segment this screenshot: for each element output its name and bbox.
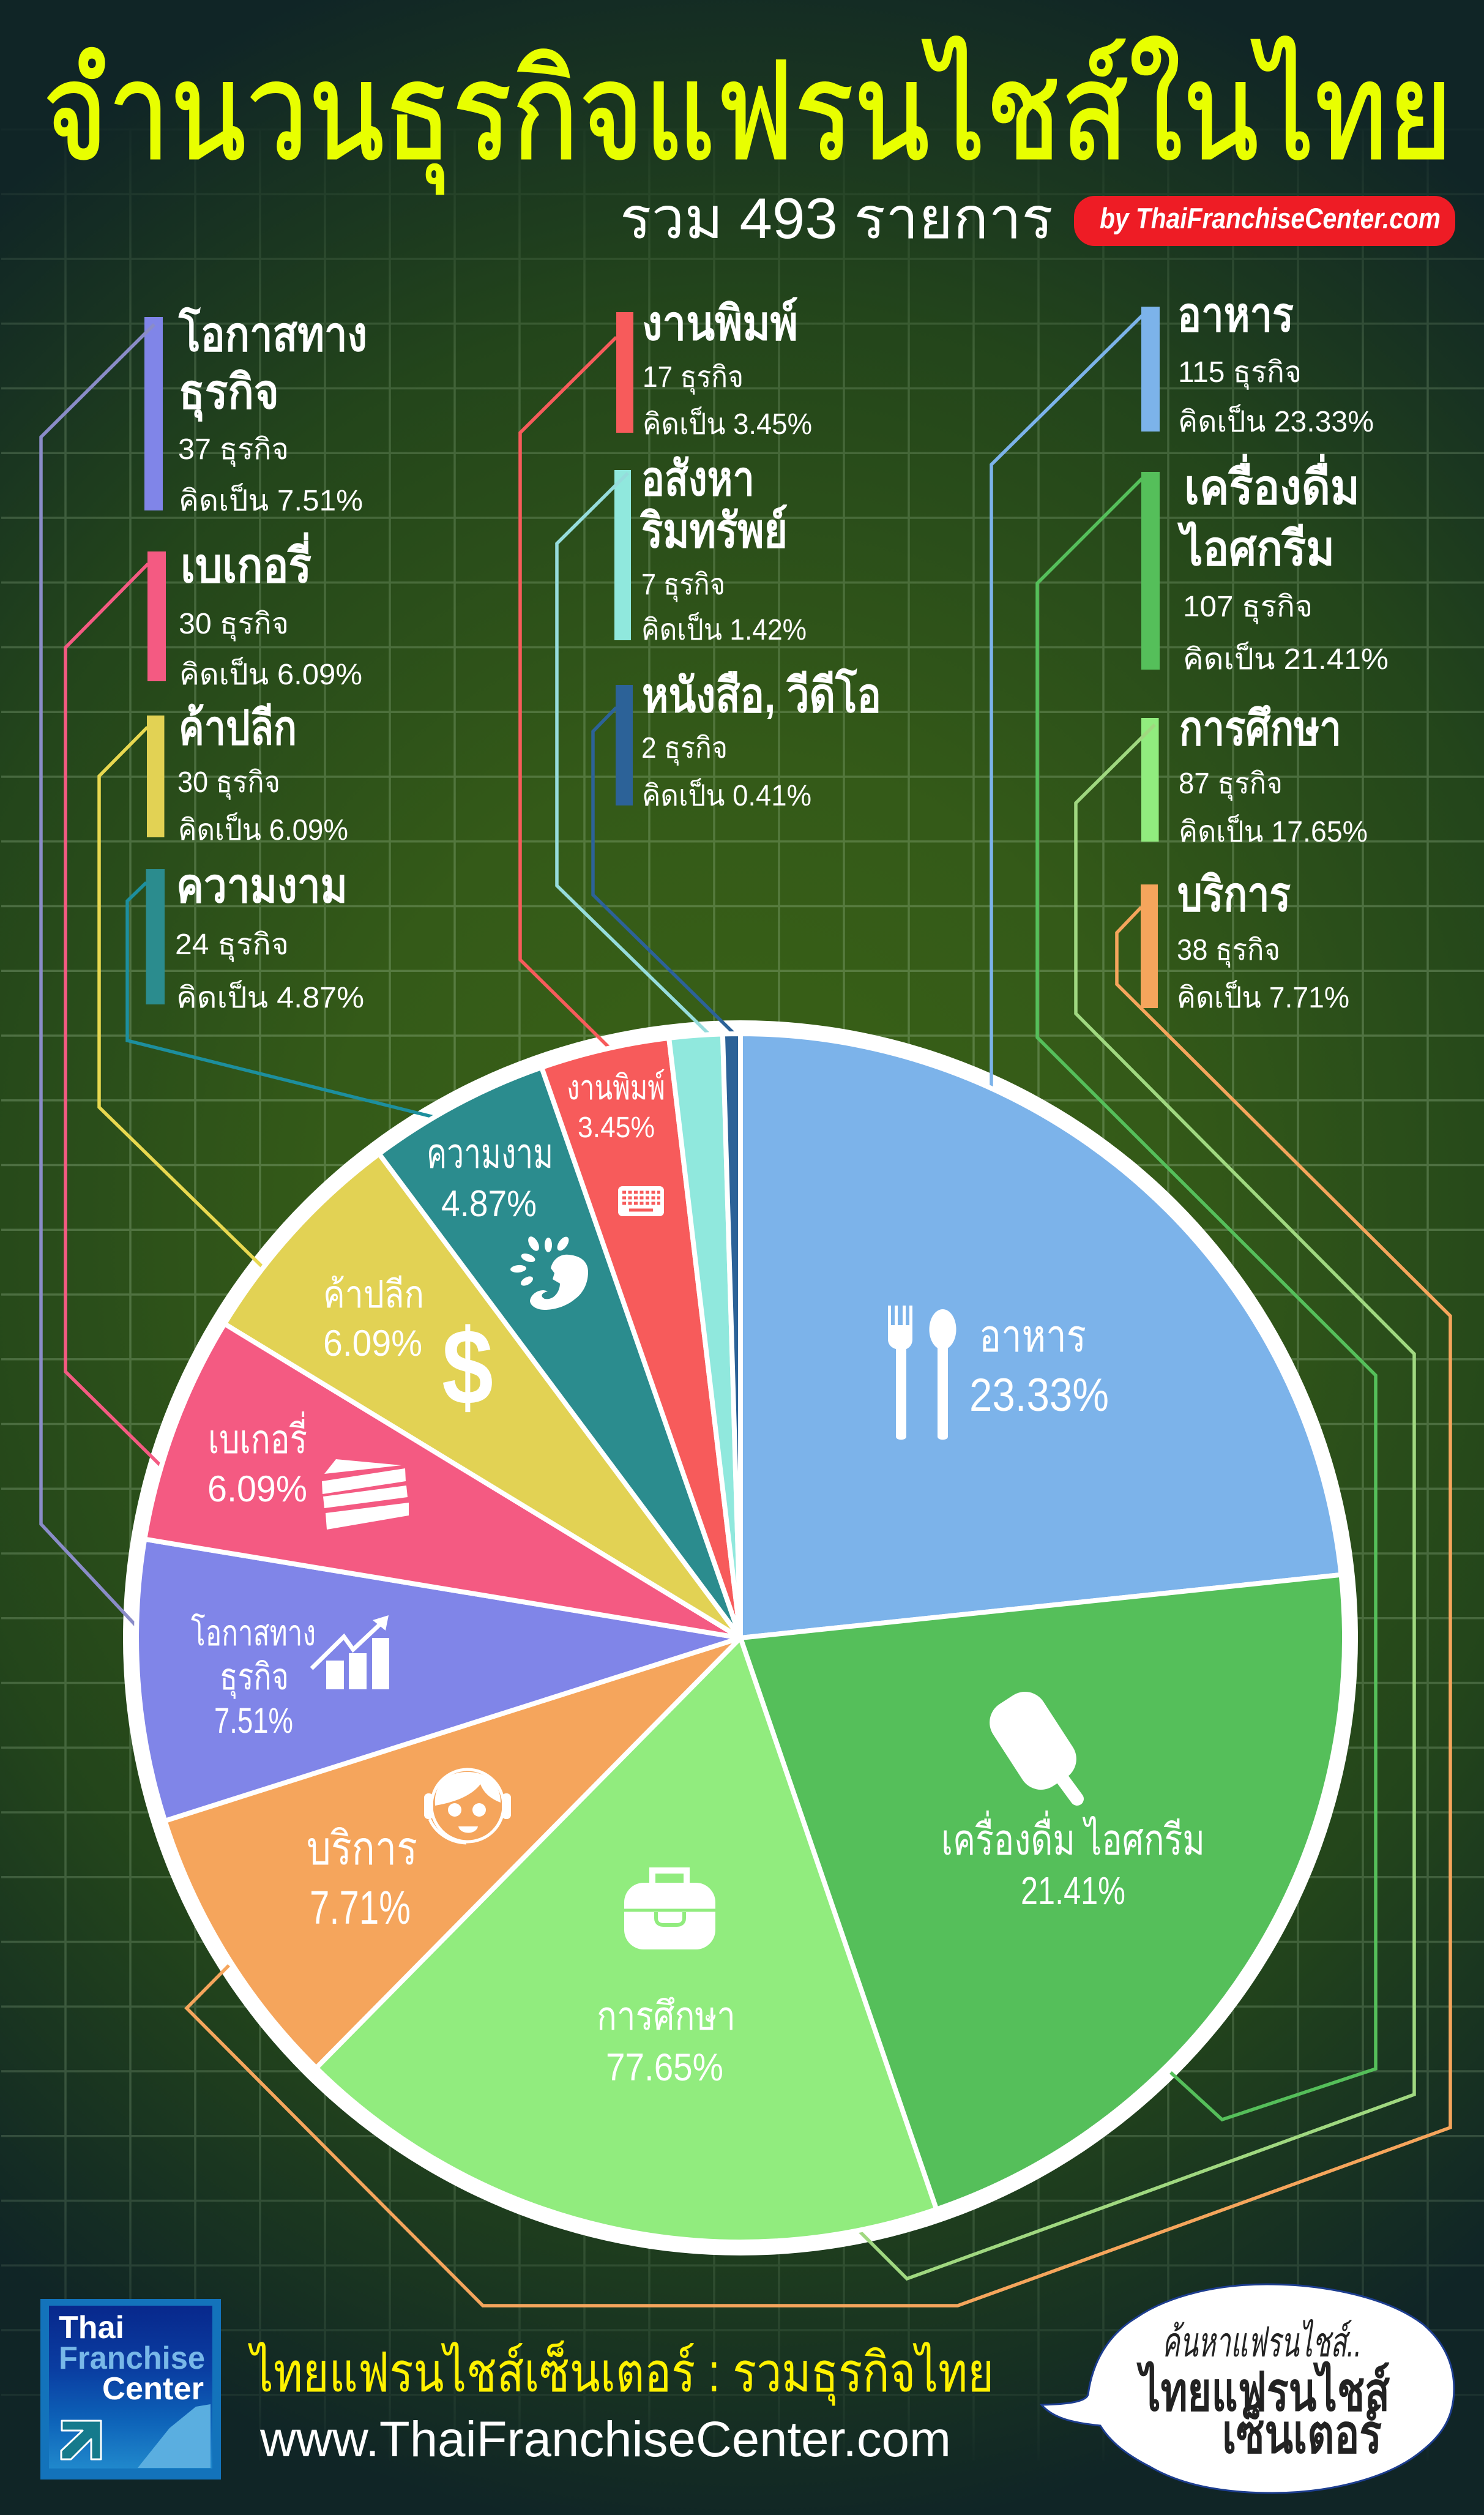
footer tagline: ไทยแฟรนไชส์เซ็นเตอร์ : รวมธุรกิจไทย xyxy=(248,2339,994,2406)
count: 38 ธุรกิจ xyxy=(1177,934,1280,968)
slice label: printing: 3.45% xyxy=(578,1112,655,1144)
slice label: food xyxy=(969,1310,1109,1421)
count: 30 ธุรกิจ xyxy=(179,608,289,641)
name: ความงาม xyxy=(176,859,348,913)
count: 37 ธุรกิจ xyxy=(178,433,289,467)
icon: briefcase xyxy=(624,1870,715,1949)
legend: drinks and ice cream: ไอศกรีม xyxy=(1177,521,1335,575)
slice label: beauty: ความงาม xyxy=(427,1130,553,1177)
legend: business opportunity xyxy=(144,306,367,517)
footer url: www.ThaiFranchiseCenter.com xyxy=(259,2412,951,2467)
slice label: education xyxy=(597,1994,736,2089)
slice label: bakery xyxy=(207,1411,307,1509)
icon: dollar: $ xyxy=(442,1307,493,1427)
name: อาหาร xyxy=(1177,288,1294,342)
speech bubble: เซ็นเตอร์ xyxy=(1222,2401,1382,2464)
count: 30 ธุรกิจ xyxy=(177,766,280,800)
legend: business opportunity: ธุรกิจ xyxy=(179,365,279,422)
name: งานพิมพ์ xyxy=(642,296,798,350)
slice label: retail xyxy=(323,1274,424,1364)
name: บริการ xyxy=(1177,867,1291,921)
bar xyxy=(1141,472,1160,670)
logo xyxy=(40,2299,221,2479)
name: โอกาสทาง xyxy=(178,306,367,361)
line: beauty xyxy=(127,883,434,1117)
legend: books and video xyxy=(616,667,881,812)
slice label: bakery: เบเกอรี่ xyxy=(208,1411,307,1462)
count: 24 ธุรกิจ xyxy=(175,929,289,962)
icon: ice cream xyxy=(981,1683,1085,1799)
slice label: opportunity: โอกาสทาง xyxy=(191,1613,316,1653)
line: printing xyxy=(520,337,616,1048)
name: การศึกษา xyxy=(1179,701,1341,755)
slice label: food: อาหาร xyxy=(979,1310,1086,1361)
subtitle: total: รวม 493 รายการ xyxy=(620,186,1053,250)
pie outer white ring xyxy=(123,1020,1358,2255)
bar xyxy=(1141,718,1159,842)
icon: cutlery xyxy=(888,1306,956,1440)
slice label: services xyxy=(307,1823,417,1934)
name: อสังหา xyxy=(641,452,755,506)
slice: beauty xyxy=(379,1067,740,1638)
share: คิดเป็น 0.41% xyxy=(642,778,811,812)
slice label: printing xyxy=(567,1068,665,1144)
legend: education xyxy=(1141,701,1368,848)
slice: education xyxy=(316,1638,936,2242)
share: คิดเป็น 21.41% xyxy=(1183,641,1389,676)
slice label: beauty: 4.87% xyxy=(441,1183,537,1224)
logo wave xyxy=(138,2404,211,2468)
line: retail xyxy=(99,727,263,1267)
share: คิดเป็น 6.09% xyxy=(178,812,348,846)
bar xyxy=(1141,307,1160,432)
share: คิดเป็น 7.71% xyxy=(1177,980,1349,1014)
legend: real estate: ริมทรัพย์ xyxy=(639,504,788,558)
line: books xyxy=(593,708,736,1035)
slice label: education: 77.65% xyxy=(606,2046,723,2089)
count: 115 ธุรกิจ xyxy=(1178,356,1302,390)
legend: real estate xyxy=(614,452,807,646)
line: real estate xyxy=(557,473,710,1035)
badge: website xyxy=(1074,196,1455,246)
icon: cake xyxy=(322,1459,409,1530)
name: เบเกอรี่ xyxy=(181,532,311,592)
legend: bakery xyxy=(147,532,362,691)
slice: opportunity xyxy=(136,1539,740,1821)
legend: food xyxy=(1141,288,1374,438)
count: 17 ธุรกิจ xyxy=(643,361,744,395)
count: 87 ธุรกิจ xyxy=(1179,768,1283,801)
bar xyxy=(616,685,633,805)
logo arrow xyxy=(61,2421,101,2459)
share: คิดเป็น 4.87% xyxy=(176,980,364,1014)
icon: headset agent xyxy=(424,1769,511,1843)
bubble small text: ค้นหาแฟรนไชส์.. xyxy=(1162,2319,1362,2366)
slice: books xyxy=(723,1034,740,1638)
slice: services xyxy=(165,1638,740,2068)
slice label: printing: งานพิมพ์ xyxy=(567,1068,665,1107)
line: services xyxy=(187,907,1450,2306)
bar xyxy=(1141,884,1158,1008)
slice label: drinks and ice cream xyxy=(941,1811,1205,1913)
slice label: education: การศึกษา xyxy=(597,1994,736,2038)
line: drinks xyxy=(1037,479,1376,2120)
legend: services xyxy=(1141,867,1349,1014)
icon: growth chart xyxy=(311,1615,389,1689)
legend: beauty xyxy=(146,859,364,1014)
icon: keyboard xyxy=(618,1186,664,1216)
share: คิดเป็น 7.51% xyxy=(179,483,363,517)
line: food xyxy=(991,315,1143,1088)
speech bubble xyxy=(1042,2284,1454,2493)
slice label: services: บริการ xyxy=(307,1823,417,1875)
logo: Center xyxy=(102,2371,204,2407)
pie chart xyxy=(136,1034,1344,2242)
slice label: opportunity: ธุรกิจ xyxy=(220,1656,289,1699)
slice label: bakery: 6.09% xyxy=(207,1468,307,1509)
slice label: food: 23.33% xyxy=(969,1369,1109,1421)
slice label: drinks and ice cream: เครื่องดื่ม ไอศกรีม xyxy=(941,1811,1205,1864)
leader lines xyxy=(41,315,1450,2306)
name: ค้าปลีก xyxy=(179,701,297,755)
slice label: opportunity: 7.51% xyxy=(214,1701,293,1741)
share: คิดเป็น 23.33% xyxy=(1178,404,1374,438)
logo: Franchise xyxy=(59,2341,205,2376)
slice: retail xyxy=(225,1154,740,1638)
count: 7 ธุรกิจ xyxy=(641,569,725,602)
bar xyxy=(144,317,163,510)
line: education xyxy=(857,725,1414,2279)
slice: real estate xyxy=(669,1034,740,1638)
bar xyxy=(147,716,164,837)
share: คิดเป็น 6.09% xyxy=(179,657,362,691)
badge: website: by ThaiFranchiseCenter.com xyxy=(1100,202,1441,234)
slice: food xyxy=(740,1034,1341,1638)
legend: printing xyxy=(616,296,812,441)
bar xyxy=(146,869,165,1004)
icon: beauty xyxy=(510,1235,588,1310)
slice label: drinks and ice cream: 21.41% xyxy=(1021,1869,1125,1913)
name: หนังสือ, วีดีโอ xyxy=(642,667,881,722)
logo text: Thai xyxy=(59,2310,124,2345)
bar xyxy=(614,470,631,640)
bar xyxy=(147,551,166,681)
slice label: retail: ค้าปลีก xyxy=(323,1274,424,1316)
legend: retail xyxy=(147,701,348,846)
slice: bakery xyxy=(144,1324,740,1638)
count: 2 ธุรกิจ xyxy=(641,732,728,766)
share: คิดเป็น 17.65% xyxy=(1179,814,1368,848)
slice label: services: 7.71% xyxy=(310,1882,411,1934)
line: opportunity xyxy=(41,324,154,1627)
line: bakery xyxy=(65,564,161,1466)
share: คิดเป็น 1.42% xyxy=(641,612,807,646)
slice label: opportunity xyxy=(191,1613,316,1741)
legend: drinks and ice cream xyxy=(1141,454,1389,676)
slice: drinks and ice cream xyxy=(740,1575,1344,2210)
count: 107 ธุรกิจ xyxy=(1183,591,1313,624)
slice: printing xyxy=(542,1038,740,1638)
slice label: beauty xyxy=(427,1130,553,1224)
bar xyxy=(616,312,633,433)
slice label: retail: 6.09% xyxy=(323,1323,422,1364)
share: คิดเป็น 3.45% xyxy=(643,406,812,441)
bubble brand text: ไทยแฟรนไชส์ xyxy=(1136,2361,1390,2422)
name: เครื่องดื่ม xyxy=(1184,454,1360,514)
